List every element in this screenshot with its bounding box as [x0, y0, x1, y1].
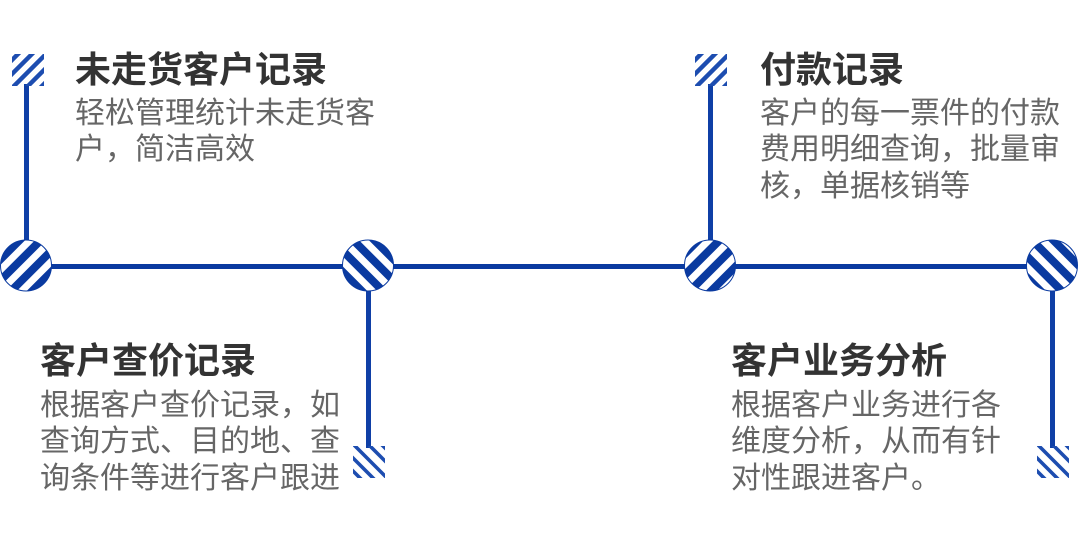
- text: 未走货客户记录 description: 户，简洁高效: [75, 133, 255, 166]
- heading: 付款记录: 付款记录: [760, 49, 904, 90]
- heading: 未走货客户记录: 未走货客户记录: [75, 49, 327, 90]
- node 2: [342, 240, 394, 291]
- connector: node 1: [0, 0, 128, 244]
- text: 未走货客户记录 description: [75, 97, 375, 166]
- heading: 客户业务分析: 客户业务分析: [731, 340, 947, 381]
- text: 客户业务分析 description: [731, 389, 1001, 495]
- node 4: [1026, 240, 1078, 291]
- heading: 客户查价记录: 客户查价记录: [40, 340, 256, 381]
- text: 客户查价记录 description: 根据客户查价记录，如: [40, 389, 340, 422]
- connector: node 3: [683, 0, 811, 244]
- text: 客户查价记录 description: 查询方式、目的地、查: [40, 425, 340, 458]
- text: 客户查价记录 description: 询条件等进行客户跟进: [40, 462, 340, 495]
- text: 客户业务分析 description: 对性跟进客户。: [731, 462, 941, 495]
- node 3: [684, 240, 736, 291]
- text: 付款记录 description: 客户的每一票件的付款: [760, 97, 1060, 130]
- text: 未走货客户记录 description: 轻松管理统计未走货客: [75, 97, 375, 130]
- connector: node 2: [340, 288, 400, 518]
- timeline graphic: [0, 54, 1078, 478]
- node 1: [0, 240, 52, 291]
- text: 付款记录 description: [760, 97, 1060, 203]
- connector: node 4: [1024, 288, 1080, 518]
- text: 付款记录 description: 费用明细查询，批量审: [760, 133, 1060, 166]
- text: 客户查价记录 description: [40, 389, 340, 495]
- text: 付款记录 description: 核，单据核销等: [760, 170, 970, 203]
- text: 客户业务分析 description: 根据客户业务进行各: [731, 389, 1001, 422]
- horizontal axis line: [26, 264, 1052, 269]
- text: 客户业务分析 description: 维度分析，从而有针: [731, 425, 1001, 458]
